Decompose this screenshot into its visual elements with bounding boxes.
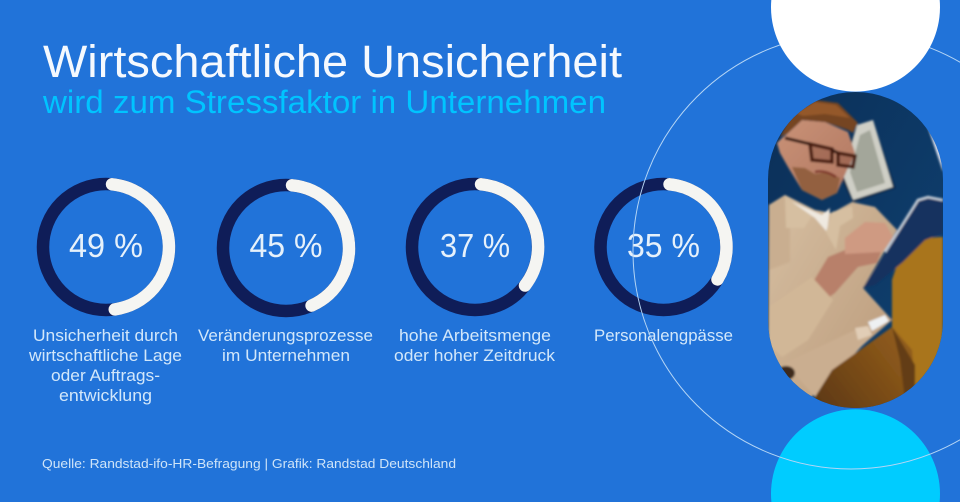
label: Unsicherheit [28, 327, 182, 405]
label: Arbeitsmenge: hohe Arbeitsmenge [399, 327, 551, 345]
donut: 45 %: 45 % [250, 227, 322, 264]
thin ring [633, 33, 960, 469]
label: Arbeitsmenge: oder hoher Zeitdruck [394, 347, 556, 365]
label: Unsicherheit: wirtschaftliche Lage [28, 347, 182, 365]
donut: 35 %: 35 % [627, 227, 700, 264]
label: Arbeitsmenge [394, 327, 556, 365]
label: Unsicherheit: Unsicherheit durch [33, 327, 178, 345]
title: Wirtschaftliche Unsicherheit [43, 36, 622, 87]
donut: 45 % [223, 185, 349, 311]
label: Unsicherheit: oder Auftrags- [51, 367, 160, 385]
label: Veränderungsprozesse: im Unternehmen [222, 347, 350, 365]
circle: white top [771, 0, 940, 92]
donut: 49 % [43, 184, 169, 310]
label: Veränderungsprozesse [198, 327, 373, 365]
label: Personalengpässe: Personalengpässe [594, 327, 733, 345]
subtitle: wird zum Stressfaktor in Unternehmen [42, 84, 606, 120]
donut: 49 %: 49 % [69, 227, 143, 264]
circle: cyan bottom [771, 409, 940, 502]
donut: 37 %: 37 % [440, 227, 510, 264]
donut: 37 % [412, 184, 538, 310]
title [42, 36, 622, 120]
donut: 35 % [600, 184, 726, 310]
label: Veränderungsprozesse: Veränderungsprozesse [198, 327, 373, 345]
photo: man with tablet [768, 92, 943, 410]
source: Quelle: Randstad-ifo-HR-Befragung | Grafik: Randstad Deutschland [42, 456, 456, 471]
label: Unsicherheit: entwicklung [59, 387, 152, 405]
